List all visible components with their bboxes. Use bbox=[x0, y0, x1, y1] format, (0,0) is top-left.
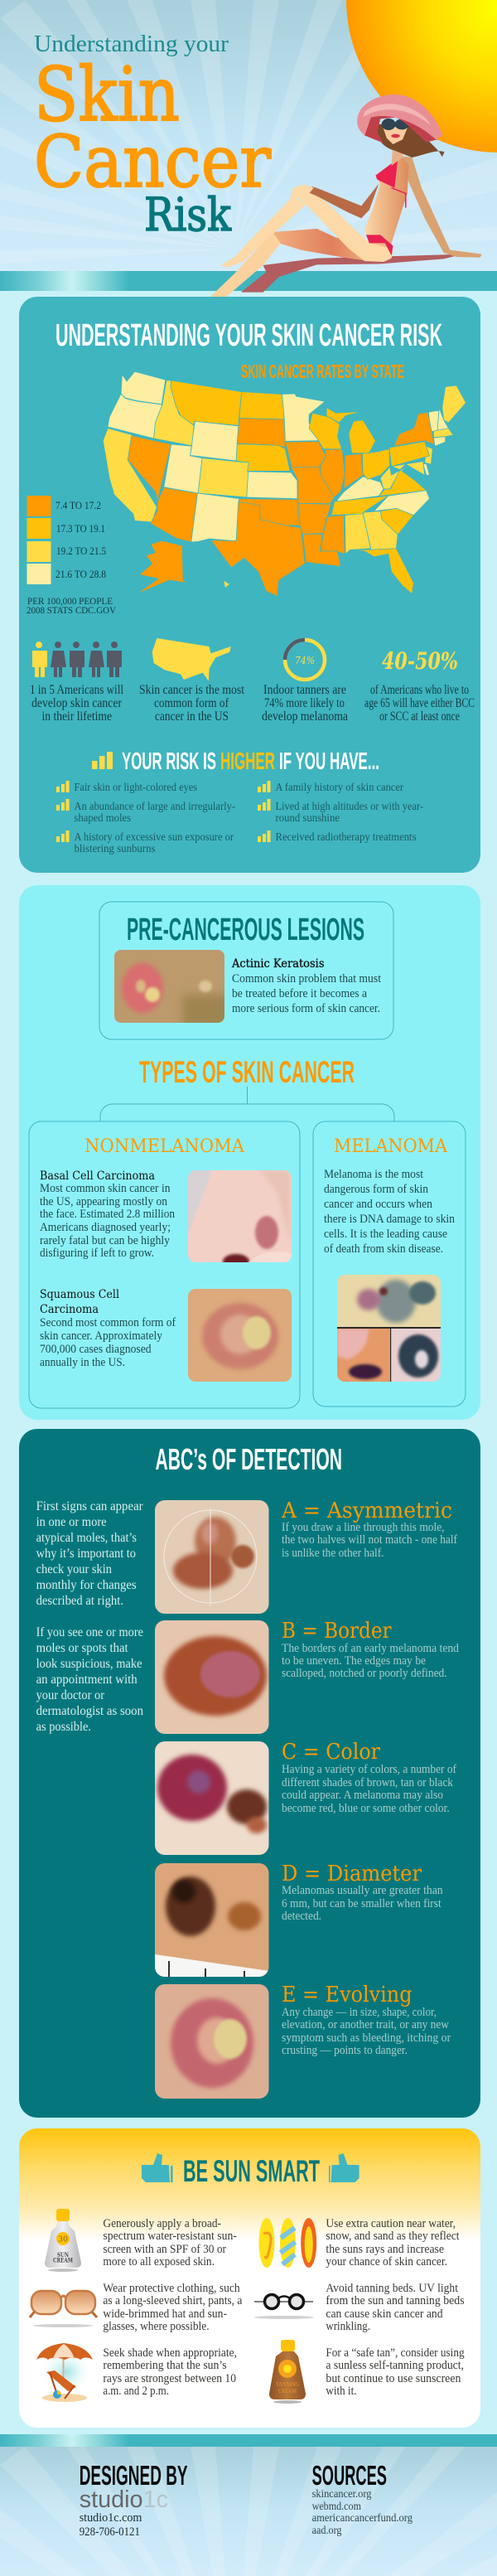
map legend: 2008 STATS CDC.GOV bbox=[27, 606, 117, 616]
text: basal cell carcinoma bbox=[40, 1169, 175, 1260]
title line: Cancer: Cancer bbox=[34, 121, 272, 204]
stat: indoor tanners: develop melanoma bbox=[262, 709, 348, 724]
tip: seek shade: rays are strongest between 10 bbox=[103, 2372, 236, 2385]
photo: color mole bbox=[155, 1741, 269, 1855]
text: C = Color bbox=[282, 1740, 456, 1815]
risk factor list: shaped moles bbox=[75, 812, 131, 825]
icon: orange sunglasses bbox=[30, 2291, 97, 2327]
stat: 40-50%: 40-50% bbox=[382, 647, 458, 675]
photo: diameter mole bbox=[155, 1863, 269, 1977]
photo: basal cell carcinoma on nose bbox=[188, 1170, 292, 1269]
tip: near water: your chance of skin cancer. bbox=[326, 2255, 447, 2269]
logo: studio1c: studio1c bbox=[80, 2486, 168, 2513]
intro text bbox=[36, 1499, 143, 1734]
panel: understanding your skin cancer risk bbox=[19, 297, 480, 873]
map legend: PER 100,000 PEOPLE bbox=[27, 597, 113, 607]
tip: sunscreen bbox=[45, 2209, 237, 2272]
text: A = Asymmetric: the two halves will not match - one half bbox=[282, 1533, 457, 1547]
intro text: moles or spots that bbox=[36, 1641, 128, 1655]
choropleth map of US states bbox=[103, 371, 466, 596]
illustration: woman in sun hat bbox=[210, 94, 482, 298]
credits: designed by: 928-706-0121 bbox=[80, 2525, 140, 2539]
stat: indoor tanners: 74% more likely to bbox=[264, 696, 345, 710]
photo: melanoma examples bbox=[337, 1275, 441, 1382]
stat: 40-50%: or SCC at least once bbox=[379, 709, 460, 724]
text: C = Color: C = Color bbox=[282, 1740, 381, 1765]
intro text: your doctor or bbox=[36, 1688, 105, 1702]
risk factor list: An abundance of large and irregularly- bbox=[75, 801, 235, 813]
text: melanoma description: of death from skin disease. bbox=[324, 1242, 443, 1256]
risk factor list: Received radiotherapy treatments bbox=[275, 831, 416, 844]
tip: sunscreen: screen with an SPF of 30 or bbox=[103, 2243, 226, 2256]
text: basal cell carcinoma: Most common skin cancer in bbox=[40, 1182, 171, 1195]
text: E = Evolving: Any change — in size, shape, color, bbox=[282, 2006, 437, 2019]
tip: tanning beds: wrinkling. bbox=[326, 2320, 370, 2333]
icon: US silhouette bbox=[152, 638, 231, 681]
tip: near water: snow, and sand as they reflect bbox=[326, 2230, 460, 2243]
footer bbox=[0, 2447, 497, 2576]
text: squamous cell carcinoma: Second most common form of bbox=[40, 1316, 176, 1329]
credits: designed by: DESIGNED BY bbox=[80, 2460, 188, 2491]
text: E = Evolving bbox=[282, 1983, 451, 2057]
tip: tanning beds: Avoid tanning beds. UV light bbox=[326, 2282, 459, 2295]
subheading: your risk is higher: IF YOU HAVE... bbox=[279, 748, 379, 775]
icon: thumbs up left bbox=[142, 2153, 173, 2182]
intro text: as possible. bbox=[36, 1720, 91, 1734]
title line: Skin: Skin bbox=[34, 51, 180, 138]
credits: sources: SOURCES bbox=[312, 2460, 387, 2491]
stat: 40-50% bbox=[364, 647, 475, 724]
tip: safe tan: but continue to use sunscreen bbox=[326, 2372, 461, 2385]
text: melanoma description: Melanoma is the most bbox=[324, 1168, 424, 1181]
text: basal cell carcinoma: Americans diagnosed yearly; bbox=[40, 1221, 171, 1234]
photo: border mole bbox=[155, 1620, 269, 1734]
subheading: your risk is higher bbox=[92, 748, 379, 775]
box: pre-cancerous lesions: be treated before it becomes a bbox=[232, 987, 367, 1000]
risk factor list: A family history of skin cancer bbox=[275, 782, 403, 794]
text: D = Diameter: detected. bbox=[282, 1910, 321, 1923]
credits: designed by bbox=[80, 2460, 188, 2539]
text: melanoma description: cells. It is the leading cause bbox=[324, 1227, 447, 1241]
stat: 1 in 5 Americans: in their lifetime bbox=[41, 709, 112, 724]
footer band bbox=[0, 2434, 497, 2447]
text: squamous cell carcinoma: 700,000 cases diagnosed bbox=[40, 1343, 152, 1356]
text: C = Color: become red, blue or some other color. bbox=[282, 1802, 450, 1815]
text: B = Border: scalloped, notched or poorly defined. bbox=[282, 1667, 447, 1680]
credits: sources bbox=[312, 2460, 413, 2537]
intro text: dermatologist as soon bbox=[36, 1704, 143, 1718]
icon: sun cream bottle: CREAM bbox=[53, 2256, 73, 2264]
icon: surfboards bbox=[258, 2218, 316, 2268]
text: A = Asymmetric: If you draw a line through this mole, bbox=[282, 1521, 444, 1534]
icon: tanning goggles bbox=[254, 2294, 314, 2319]
text: D = Diameter: 6 mm, but can be smaller when first bbox=[282, 1897, 442, 1910]
text: B = Border: B = Border bbox=[282, 1619, 392, 1644]
panel: ABCs of detection bbox=[19, 1429, 480, 2118]
tip: protective clothing: glasses, where possible. bbox=[103, 2320, 210, 2333]
text: A = Asymmetric bbox=[281, 1499, 457, 1560]
text: melanoma description: dangerous form of skin bbox=[324, 1183, 428, 1196]
text: D = Diameter bbox=[282, 1862, 443, 1923]
tip: seek shade: Seek shade when appropriate, bbox=[103, 2346, 237, 2360]
text: E = Evolving: E = Evolving bbox=[282, 1983, 413, 2007]
deck band bbox=[0, 271, 497, 291]
text: basal cell carcinoma: disfiguring if left to grow. bbox=[40, 1247, 154, 1260]
photo: squamous cell carcinoma bbox=[188, 1289, 292, 1382]
text: melanoma description: there is DNA damage to skin bbox=[324, 1213, 455, 1226]
box: melanoma bbox=[313, 1121, 466, 1407]
risk factor list bbox=[56, 781, 423, 855]
panel: be sun smart bbox=[19, 2128, 480, 2428]
tip: near water: Use extra caution near water, bbox=[326, 2217, 456, 2230]
text: D = Diameter: D = Diameter bbox=[282, 1862, 422, 1886]
text: squamous cell carcinoma: annually in the US. bbox=[40, 1356, 125, 1369]
stat: most common cancer: cancer in the US bbox=[155, 709, 229, 724]
text: B = Border: The borders of an early melanoma tend bbox=[282, 1642, 460, 1655]
tip: safe tan: with it. bbox=[326, 2385, 356, 2398]
tip: tanning beds bbox=[254, 2282, 465, 2333]
tip: sunscreen: more to all exposed skin. bbox=[103, 2255, 215, 2269]
stat: most common cancer: Skin cancer is the most bbox=[139, 683, 245, 697]
icon: tanning cream bottle: CREAM bbox=[278, 2388, 297, 2394]
photo: evolving lesion bbox=[155, 1984, 269, 2099]
text: B = Border bbox=[282, 1619, 460, 1680]
connector tree bbox=[100, 1087, 394, 1121]
panel: pre-cancerous lesions and types bbox=[19, 885, 480, 1420]
stat: 1 in 5 Americans: 1 in 5 Americans will bbox=[30, 683, 123, 697]
credits: sources: aad.org bbox=[312, 2525, 341, 2537]
intro text: described at right. bbox=[36, 1594, 123, 1608]
text: E = Evolving: elevation, or another trait, or any new bbox=[282, 2018, 449, 2031]
risk factor list: Fair skin or light-colored eyes bbox=[75, 782, 197, 794]
tip: seek shade: remembering that the sun’s bbox=[103, 2359, 227, 2372]
box: pre-cancerous lesions bbox=[99, 902, 393, 1039]
intro text: why it’s important to bbox=[36, 1547, 136, 1561]
title line: Risk: Risk bbox=[144, 188, 232, 241]
tip: seek shade: a.m. and 2 p.m. bbox=[103, 2385, 169, 2398]
tip: safe tan bbox=[269, 2340, 465, 2404]
intro text: an appointment with bbox=[36, 1673, 138, 1687]
text: basal cell carcinoma: the face. Estimated 2.8 million bbox=[40, 1208, 175, 1221]
risk factor list: Lived at high altitudes or with year- bbox=[275, 801, 423, 813]
subheading: your risk is higher: YOUR RISK IS bbox=[122, 748, 216, 775]
intro text: look suspicious, make bbox=[36, 1657, 142, 1671]
tip: seek shade bbox=[36, 2343, 237, 2402]
text: basal cell carcinoma: Basal Cell Carcinoma bbox=[40, 1169, 155, 1183]
credits: sources: skincancer.org bbox=[312, 2488, 371, 2501]
tip: near water bbox=[258, 2217, 460, 2269]
stat: most common cancer bbox=[139, 638, 245, 724]
text: E = Evolving: crusting — points to danger. bbox=[282, 2044, 408, 2057]
box: nonmelanoma bbox=[29, 1121, 300, 1408]
risk factor list: round sunshine bbox=[275, 812, 340, 825]
text: B = Border: to be uneven. The edges may be bbox=[282, 1654, 426, 1668]
box: melanoma: MELANOMA bbox=[334, 1136, 448, 1157]
title line: Understanding your: Understanding your bbox=[34, 31, 229, 57]
icon: five people, one highlighted bbox=[32, 642, 122, 677]
map legend: 19.2 TO 21.5 bbox=[56, 545, 106, 557]
stat: 1 in 5 Americans: develop skin cancer bbox=[31, 696, 123, 710]
text: basal cell carcinoma: rarely fatal but can be highly bbox=[40, 1234, 170, 1247]
icon: tanning cream bottle bbox=[269, 2340, 306, 2404]
photo: asymmetric mole bbox=[155, 1500, 269, 1614]
intro text: in one or more bbox=[36, 1515, 107, 1529]
tip: safe tan: For a “safe tan”, consider using bbox=[326, 2346, 465, 2360]
tip: near water: the suns rays and increase bbox=[326, 2243, 444, 2256]
tip: sunscreen: Generously apply a broad- bbox=[103, 2217, 221, 2230]
text: C = Color: different shades of brown, tan or black bbox=[282, 1776, 454, 1789]
subheading: your risk is higher: HIGHER bbox=[220, 748, 275, 775]
icon: tanning cream bottle: TANNING bbox=[276, 2381, 299, 2388]
icon: sun cream bottle bbox=[45, 2209, 81, 2272]
tip: protective clothing: as a long-sleeved shirt, pants, a bbox=[103, 2294, 243, 2307]
text: C = Color: could appear. A melanoma may also bbox=[282, 1789, 443, 1802]
title bbox=[34, 31, 272, 241]
credits: sources: webmd.com bbox=[312, 2501, 361, 2513]
intro text: monthly for changes bbox=[36, 1578, 137, 1592]
text: A = Asymmetric: is unlike the other half. bbox=[282, 1547, 384, 1560]
stat: indoor tanners: Indoor tanners are bbox=[263, 683, 346, 697]
icon: 74% ring chart: 74% bbox=[295, 655, 315, 666]
text: C = Color: Having a variety of colors, a number of bbox=[282, 1763, 456, 1776]
text: squamous cell carcinoma: Squamous Cell bbox=[40, 1288, 119, 1301]
risk factor list: blistering sunburns bbox=[75, 843, 156, 855]
icon: beach umbrella and chair bbox=[36, 2343, 93, 2402]
tip: protective clothing bbox=[30, 2282, 243, 2333]
icon: sun cream bottle: SUN bbox=[57, 2251, 69, 2259]
heading: ABC’s OF DETECTION bbox=[156, 1442, 342, 1476]
tip: protective clothing: Wear protective clothing, such bbox=[103, 2282, 240, 2295]
sun bbox=[346, 0, 497, 153]
map legend: 17.3 TO 19.1 bbox=[56, 523, 105, 535]
box: pre-cancerous lesions: more serious form of skin cancer. bbox=[232, 1002, 380, 1015]
intro text: check your skin bbox=[36, 1562, 112, 1576]
text: A = Asymmetric: A = Asymmetric bbox=[281, 1499, 452, 1523]
intro text: If you see one or more bbox=[36, 1625, 143, 1639]
photo: actinic keratosis bbox=[114, 950, 224, 1023]
icon: sun cream bottle: 30 bbox=[58, 2236, 68, 2244]
text: basal cell carcinoma: the US, appearing mostly on bbox=[40, 1195, 167, 1208]
text: melanoma description bbox=[324, 1168, 455, 1256]
map legend: 7.4 TO 17.2 bbox=[55, 500, 101, 511]
box: pre-cancerous lesions: Common skin problem that must bbox=[232, 972, 382, 985]
credits: designed by: studio1c.com bbox=[80, 2511, 142, 2525]
stat: most common cancer: common form of bbox=[154, 696, 229, 710]
stat: 40-50%: of Americans who live to bbox=[370, 683, 469, 697]
credits: sources: americancancerfund.org bbox=[312, 2512, 413, 2525]
tip: tanning beds: from the sun and tanning beds bbox=[326, 2294, 465, 2307]
text: squamous cell carcinoma: Carcinoma bbox=[40, 1303, 99, 1316]
text: melanoma description: cancer and occurs when bbox=[324, 1198, 432, 1211]
box: nonmelanoma: NONMELANOMA bbox=[84, 1136, 245, 1157]
intro text: First signs can appear bbox=[36, 1499, 143, 1513]
intro text: atypical moles, that’s bbox=[36, 1531, 137, 1545]
heading: BE SUN SMART bbox=[183, 2154, 320, 2188]
icon: thumbs up right bbox=[329, 2153, 359, 2182]
tip: sunscreen: spectrum water-resistant sun- bbox=[103, 2230, 237, 2243]
stat: 1 in 5 Americans bbox=[30, 642, 123, 724]
text: squamous cell carcinoma bbox=[40, 1288, 176, 1369]
tip: protective clothing: wide-brimmed hat and sun- bbox=[103, 2307, 227, 2321]
risk factor list: A history of excessive sun exposure or bbox=[75, 831, 234, 844]
stat: indoor tanners bbox=[262, 640, 348, 724]
tip: safe tan: a sunless self-tanning product, bbox=[326, 2359, 464, 2372]
hero section bbox=[0, 0, 497, 291]
text: E = Evolving: symptom such as bleeding, itching or bbox=[282, 2031, 451, 2045]
text: D = Diameter: Melanomas usually are greater than bbox=[282, 1884, 443, 1897]
icon: bars bbox=[92, 752, 113, 769]
box: pre-cancerous lesions: Actinic Keratosis bbox=[231, 957, 325, 971]
tip: tanning beds: can cause skin cancer and bbox=[326, 2307, 443, 2321]
map legend bbox=[27, 496, 117, 616]
text: squamous cell carcinoma: skin cancer. Approximately bbox=[40, 1329, 162, 1343]
map legend: 21.6 TO 28.8 bbox=[55, 569, 106, 580]
